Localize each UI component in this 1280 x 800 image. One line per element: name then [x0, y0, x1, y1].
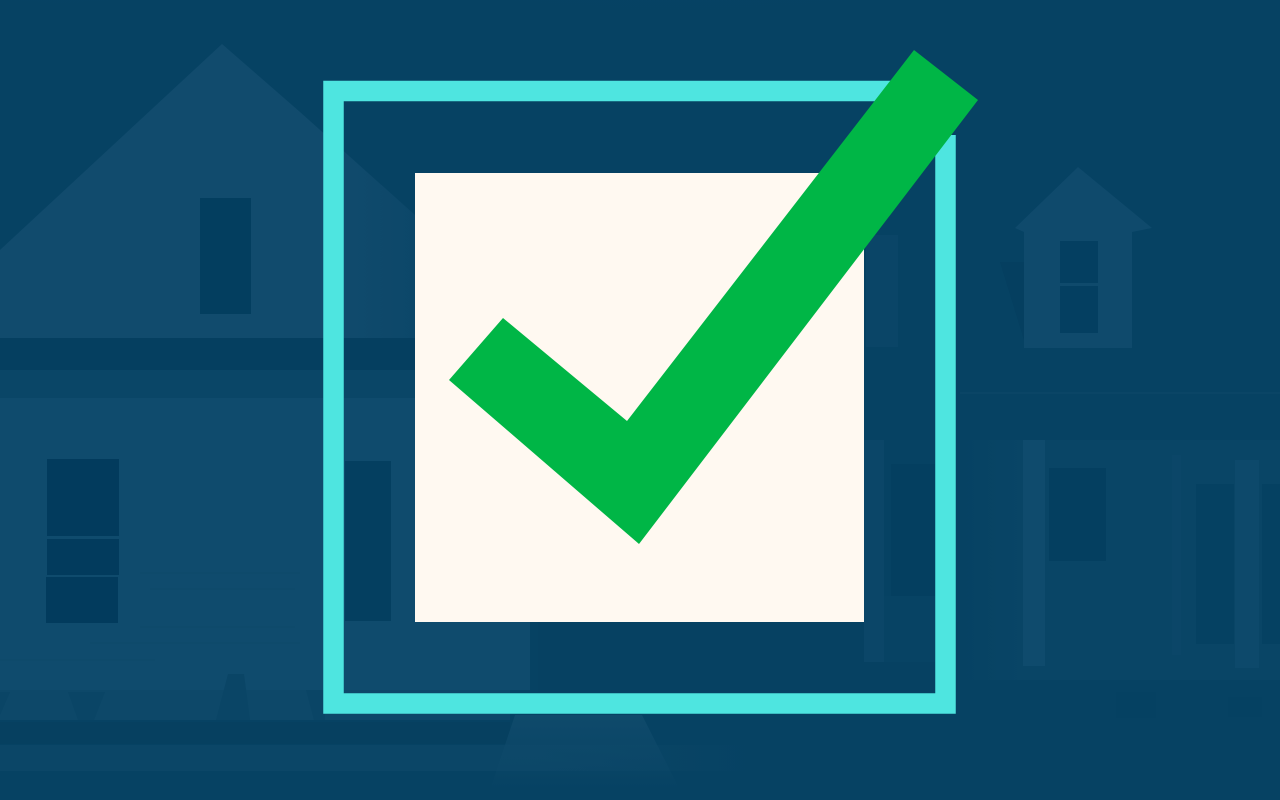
house: right dormer: [980, 167, 1152, 348]
house: shrubs: [0, 674, 325, 720]
icon: green check mark: [449, 50, 978, 544]
house: left windows: [46, 198, 391, 623]
house: left gable and wall: [0, 44, 760, 771]
sky: faint lighter patches: [0, 0, 1040, 90]
house: center and right facade: [866, 235, 1280, 680]
checkbox outer frame: [334, 91, 946, 704]
house: center lower shadow and walkway: [490, 622, 958, 790]
checkbox inner cream square: [415, 173, 864, 622]
house: siding lines: [0, 573, 300, 660]
house: porch columns and windows: [864, 440, 1280, 718]
